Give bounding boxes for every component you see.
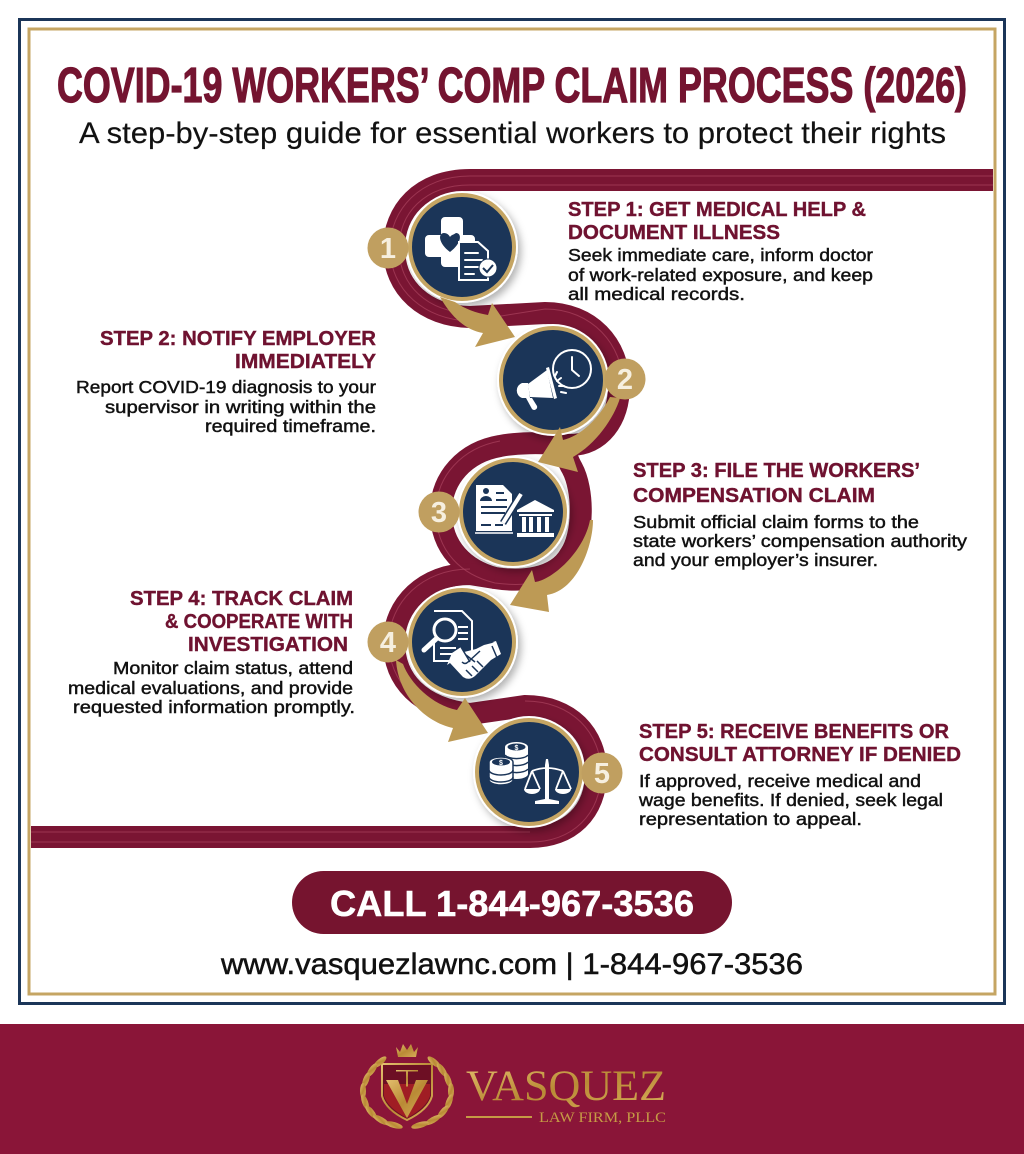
logo shield (382, 1064, 432, 1120)
step 4 text: medical evaluations, and provide (68, 678, 353, 698)
step 4 text: STEP 4: TRACK CLAIM (130, 588, 353, 610)
badge 1 (368, 228, 408, 268)
website and phone: www.vasquezlawnc.com | 1-844-967-3536 (220, 948, 803, 981)
step 5 text: STEP 5: RECEIVE BENEFITS OR (639, 721, 950, 743)
call button: CALL 1-844-967-3536 (330, 883, 694, 924)
footer band (0, 1024, 1024, 1154)
step 4 text: & COOPERATE WITH (165, 611, 353, 633)
step 4 text: INVESTIGATION (188, 634, 348, 656)
step 2 text (76, 328, 377, 436)
badge 4 (368, 622, 408, 662)
icon: coins and scales: $ (515, 745, 519, 752)
step 5 text (638, 721, 961, 829)
logo: Vasquez Law Firm (359, 1044, 666, 1130)
badge 1: 1 (380, 233, 396, 265)
logo rule (466, 1116, 532, 1118)
step 1 medallion (406, 191, 518, 303)
step 1 text (568, 199, 873, 304)
logo wordmark: VASQUEZ (466, 1063, 666, 1110)
arrow: step 4 to 5 (396, 660, 488, 742)
step 5 text: If approved, receive medical and (639, 771, 921, 791)
icon: megaphone and clock (517, 350, 591, 410)
arrow: step 1 to 2 (440, 297, 515, 347)
step 1 text: of work-related exposure, and keep (568, 265, 873, 285)
step 2 text: IMMEDIATELY (235, 351, 377, 373)
step 4 text: Monitor claim status, attend (113, 658, 353, 678)
step 3 text: and your employer’s insurer. (633, 550, 878, 570)
step 5 medallion (473, 716, 585, 828)
badge 3 (418, 492, 460, 532)
subtitle: A step-by-step guide for essential workers to protect their rights (79, 117, 946, 150)
inner gold border (29, 29, 995, 994)
arrow: step 3 to 4 (510, 520, 593, 612)
step 3 medallion (457, 456, 569, 568)
winding ribbon path (31, 176, 993, 842)
logo crown (396, 1044, 418, 1057)
step 2 text: STEP 2: NOTIFY EMPLOYER (100, 328, 377, 350)
step 2 text: supervisor in writing within the (105, 397, 376, 417)
step 5 text: representation to appeal. (639, 809, 862, 829)
step 2 text: Report COVID-19 diagnosis to your (76, 377, 376, 397)
badge 3: 3 (431, 497, 447, 529)
step 2 text: required timeframe. (205, 416, 376, 436)
icon: claim form and courthouse (475, 485, 554, 537)
step 1 text: DOCUMENT ILLNESS (568, 222, 780, 244)
icon: medical cross and document (425, 217, 497, 280)
step 1 text: all medical records. (568, 284, 745, 304)
step 5 text: CONSULT ATTORNEY IF DENIED (639, 744, 961, 766)
logo subtitle: LAW FIRM, PLLC (539, 1110, 666, 1126)
logo wreath (359, 1055, 455, 1130)
badge 5: 5 (594, 758, 610, 790)
step 3 text: STEP 3: FILE THE WORKERS’ (633, 460, 920, 482)
step 5 text: wage benefits. If denied, seek legal (638, 790, 943, 810)
step 3 text: Submit official claim forms to the (633, 512, 919, 532)
step 4 medallion (406, 586, 518, 698)
call button (292, 871, 732, 934)
icon: coins and scales (489, 742, 571, 804)
badge 5 (582, 752, 622, 794)
badge 2 (604, 358, 646, 400)
arrow: step 2 to 3 (538, 397, 620, 472)
icon: coins and scales: $ (499, 760, 503, 767)
badge 2: 2 (617, 364, 633, 396)
badge 4: 4 (380, 627, 396, 659)
icon: magnifier and handshake (424, 611, 501, 679)
step 3 text: COMPENSATION CLAIM (633, 485, 875, 507)
step 1 text: STEP 1: GET MEDICAL HELP & (568, 199, 866, 221)
step 4 text (68, 588, 355, 717)
step 1 text: Seek immediate care, inform doctor (568, 245, 873, 265)
step 4 text: requested information promptly. (73, 697, 355, 717)
step 3 text (633, 460, 967, 570)
step 3 text: state workers’ compensation authority (633, 531, 967, 551)
step 2 medallion (497, 324, 609, 436)
